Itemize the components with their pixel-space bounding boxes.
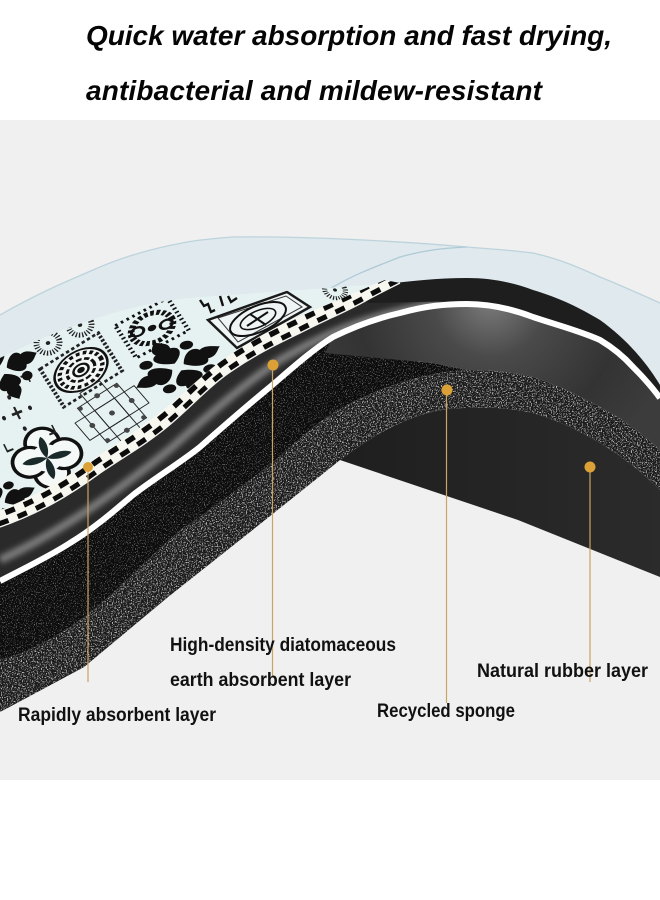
label: high-density diatomaceous earth absorbent layer: earth absorbent layer — [170, 670, 352, 691]
recycled sponge layer — [0, 370, 660, 712]
title — [86, 20, 612, 106]
grey diatomaceous layer — [0, 300, 470, 610]
black top cap — [355, 278, 660, 398]
band lower edge — [0, 283, 400, 527]
label: high-density diatomaceous earth absorbent layer — [170, 635, 396, 691]
tile motifs — [0, 286, 348, 510]
panel: product background — [0, 120, 660, 780]
label: rapidly absorbent layer: Rapidly absorbent layer — [18, 705, 217, 726]
white strip — [0, 304, 660, 581]
patterned tile surface — [0, 280, 400, 528]
high-density foam shadow layer — [0, 337, 467, 660]
tile base — [0, 283, 400, 527]
leader lines — [88, 365, 590, 703]
grey inner sheet — [325, 304, 660, 450]
squiggle tile — [200, 296, 237, 312]
marker dots — [83, 360, 596, 472]
natural rubber layer — [0, 408, 660, 712]
diamond border band — [0, 280, 400, 526]
emblem tile — [208, 292, 310, 348]
label: natural rubber layer: Natural rubber layer — [477, 661, 649, 682]
label: high-density diatomaceous earth absorbent layer: High-density diatomaceous — [170, 635, 396, 656]
title: antibacterial and mildew-resistant — [86, 75, 544, 106]
grey sheen — [0, 303, 440, 560]
water film layer — [0, 237, 660, 420]
title: Quick water absorption and fast drying, — [86, 20, 612, 51]
mat layers cross-section — [0, 278, 660, 712]
label: recycled sponge: Recycled sponge — [377, 701, 515, 722]
